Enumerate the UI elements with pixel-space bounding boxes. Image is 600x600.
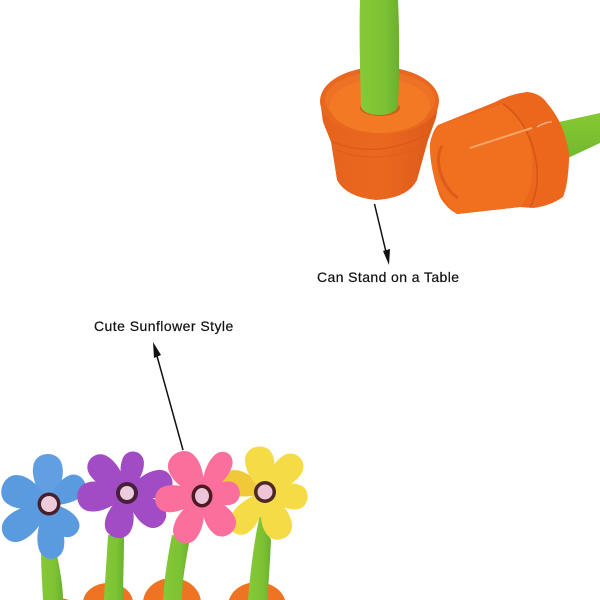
stem	[360, 0, 399, 115]
label: Can Stand on a Table: Can Stand on a Table	[317, 269, 459, 285]
label: Cute Sunflower Style: Cute Sunflower Style	[94, 318, 234, 334]
tipped pot body	[430, 92, 569, 214]
flower: pink	[154, 445, 241, 548]
pots row	[40, 578, 286, 600]
flower: blue	[0, 454, 91, 560]
arrow: to Can Stand on a Table	[374, 204, 390, 265]
flower: yellow	[219, 444, 309, 544]
photo: tipped flowerpot with stem	[430, 92, 600, 214]
stems	[41, 515, 271, 600]
flower: purple	[76, 449, 176, 541]
right stem	[559, 113, 600, 158]
pot rim	[320, 67, 439, 135]
photo: four flower pens	[0, 444, 309, 600]
pot body	[320, 100, 439, 200]
photo: standing flowerpot with stem	[320, 0, 439, 200]
arrow: to Cute Sunflower Style	[153, 342, 183, 450]
